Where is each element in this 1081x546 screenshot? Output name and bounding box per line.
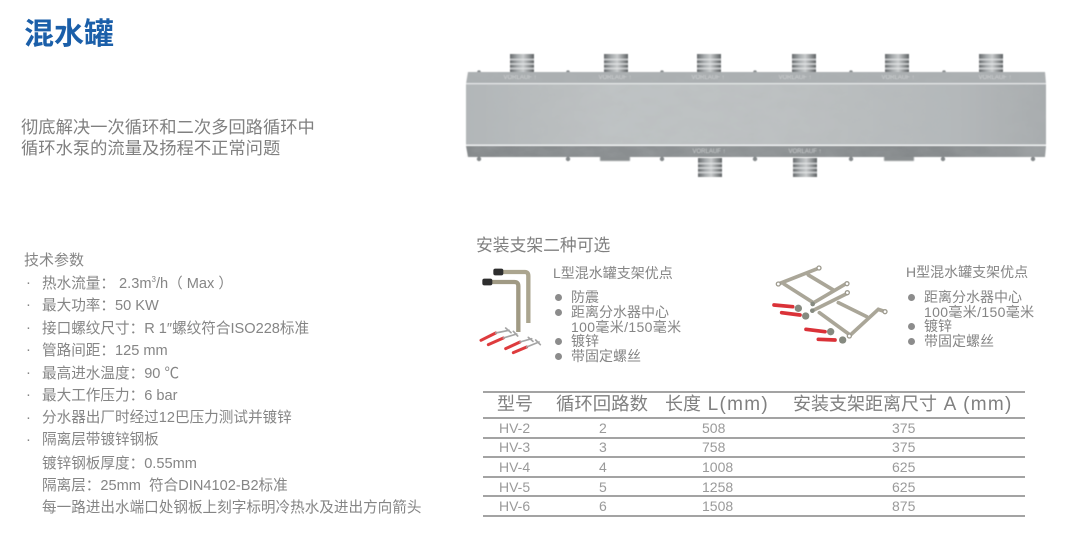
- intro text: 循环水泵的流量及扬程不正常问题: [21, 138, 280, 158]
- row HV-2: 2: [599, 420, 607, 436]
- engraved labels: VORLAUF ↑: [788, 149, 822, 155]
- row HV-2: HV-2: [499, 420, 530, 436]
- panel: technical parameters: 隔离层带镀锌钢板: [42, 432, 159, 448]
- table header: 循环回路数: [556, 393, 648, 414]
- parameter: test: ·: [26, 410, 31, 426]
- table header: 长度 L(mm): [665, 394, 769, 415]
- row HV-3: 3: [599, 439, 607, 455]
- row HV-6: [499, 498, 915, 514]
- bullet: shock proof: [555, 289, 599, 305]
- bracket heading: 安装支架二种可选: [476, 236, 610, 255]
- parameter: flow: [26, 272, 233, 293]
- bullet: distance: 距离分水器中心: [571, 304, 669, 320]
- parameter: insulation: ·: [26, 432, 31, 448]
- row HV-4: 4: [599, 459, 607, 475]
- engraved labels: VORLAUF ↑: [691, 75, 725, 81]
- parameter: power: [26, 294, 159, 315]
- engraved labels: VORLAUF ↑: [692, 149, 726, 155]
- parameter: pressure: [26, 384, 178, 405]
- parameter: markings: 每一路进出水端口处钢板上刻字标明冷热水及进出方向箭头: [42, 500, 421, 516]
- panel: technical parameters: 热水流量： 2.3m3/h（ Max ）: [42, 272, 233, 293]
- table header: 安装支架距离尺寸 A (mm): [793, 394, 1013, 415]
- icon: L bracket set: [481, 269, 540, 353]
- small bolts: [477, 70, 1035, 161]
- H bracket heading: H型混水罐支架优点: [906, 264, 1028, 280]
- tank body: [466, 72, 1046, 157]
- row HV-2: 375: [892, 420, 915, 436]
- parameter: thread: ·: [26, 320, 31, 336]
- row HV-6: 6: [599, 498, 607, 514]
- engraved labels: VORLAUF ↑: [778, 75, 812, 81]
- panel: H bracket advantages: [906, 264, 1034, 349]
- row HV-3: HV-3: [499, 439, 530, 455]
- parameter: pipe spacing: ·: [26, 342, 31, 358]
- row HV-4: 1008: [702, 459, 733, 475]
- intro text: [21, 117, 315, 158]
- parameter: sheet thickness: 镀锌钢板厚度：0.55mm: [42, 452, 197, 473]
- bullet: galvanized: [555, 333, 599, 349]
- parameter: temperature: [26, 362, 179, 383]
- panel: technical parameters: [24, 252, 421, 516]
- bullet: distance: 100毫米/150毫米: [924, 304, 1034, 320]
- intro text: 彻底解决一次循环和二次多回路循环中: [21, 117, 315, 137]
- bullet: galvanized: 镀锌: [571, 333, 599, 349]
- row HV-4: HV-4: [499, 459, 530, 475]
- row HV-5: [499, 479, 915, 495]
- parameter: flow: ·: [26, 275, 31, 291]
- row HV-5: 1258: [702, 479, 733, 495]
- bullet: distance: 100毫米/150毫米: [571, 319, 681, 335]
- parameter: pressure: ·: [26, 387, 31, 403]
- panel: L bracket advantages: [553, 265, 681, 364]
- parameter: thread: [26, 317, 309, 338]
- parameter: pipe spacing: [26, 339, 168, 360]
- row HV-2: 508: [702, 420, 725, 436]
- row HV-3: [499, 439, 915, 455]
- panel: technical parameters: 最大功率：50 KW: [42, 294, 159, 315]
- title: 混水罐: [24, 18, 114, 51]
- panel: technical parameters: 最大工作压力：6 bar: [42, 384, 177, 405]
- panel: technical parameters: 最高进水温度：90 ℃: [42, 362, 179, 383]
- row HV-6: HV-6: [499, 498, 530, 514]
- bullet: screws: 带固定螺丝: [924, 333, 994, 349]
- panel: technical parameters: 分水器出厂时经过12巴压力测试并镀锌: [42, 410, 292, 426]
- bullet: distance: [908, 289, 1034, 320]
- parameter: test: [26, 409, 292, 426]
- bullet: distance: 距离分水器中心: [924, 289, 1022, 305]
- top outlet pipes: [510, 54, 1003, 73]
- row HV-4: 625: [892, 459, 915, 475]
- engraved labels: VORLAUF ↑: [503, 75, 537, 81]
- parameter: insulation layer: 隔离层：25mm 符合DIN4102-B2标准: [42, 474, 288, 495]
- bullet: shock proof: 防震: [571, 289, 599, 305]
- parameter: insulation: [26, 431, 159, 448]
- row HV-3: 375: [892, 439, 915, 455]
- bullet: galvanized: [908, 318, 952, 334]
- bullet: galvanized: 镀锌: [924, 318, 952, 334]
- bottom ports: [600, 156, 914, 161]
- row HV-5: 625: [892, 479, 915, 495]
- row HV-2: [499, 420, 915, 436]
- parameter: temperature: ·: [26, 365, 31, 381]
- parameter: power: ·: [26, 297, 31, 313]
- table header: 型号: [497, 394, 533, 414]
- L bracket heading: L型混水罐支架优点: [553, 265, 673, 281]
- row HV-5: 5: [599, 479, 607, 495]
- row HV-4: [499, 459, 915, 475]
- row HV-5: HV-5: [499, 479, 530, 495]
- panel: technical parameters: 管路间距：125 mm: [42, 339, 168, 360]
- engraved labels: VORLAUF ↑: [978, 75, 1012, 81]
- row HV-6: 875: [892, 498, 915, 514]
- icon: H bracket set: [774, 266, 887, 344]
- engraved labels: VORLAUF ↑: [598, 75, 632, 81]
- engraved labels: [503, 75, 1012, 155]
- table header: [497, 393, 1013, 415]
- bullet: screws: 带固定螺丝: [571, 348, 641, 364]
- bottom outlet pipes: [698, 158, 817, 177]
- parameters heading: 技术参数: [24, 252, 84, 269]
- row HV-6: 1508: [702, 498, 733, 514]
- panel: technical parameters: 接口螺纹尺寸：R 1″螺纹符合ISO228标准: [42, 317, 309, 338]
- row HV-3: 758: [702, 439, 725, 455]
- bullet: distance: [555, 304, 681, 335]
- engraved labels: VORLAUF ↑: [881, 75, 915, 81]
